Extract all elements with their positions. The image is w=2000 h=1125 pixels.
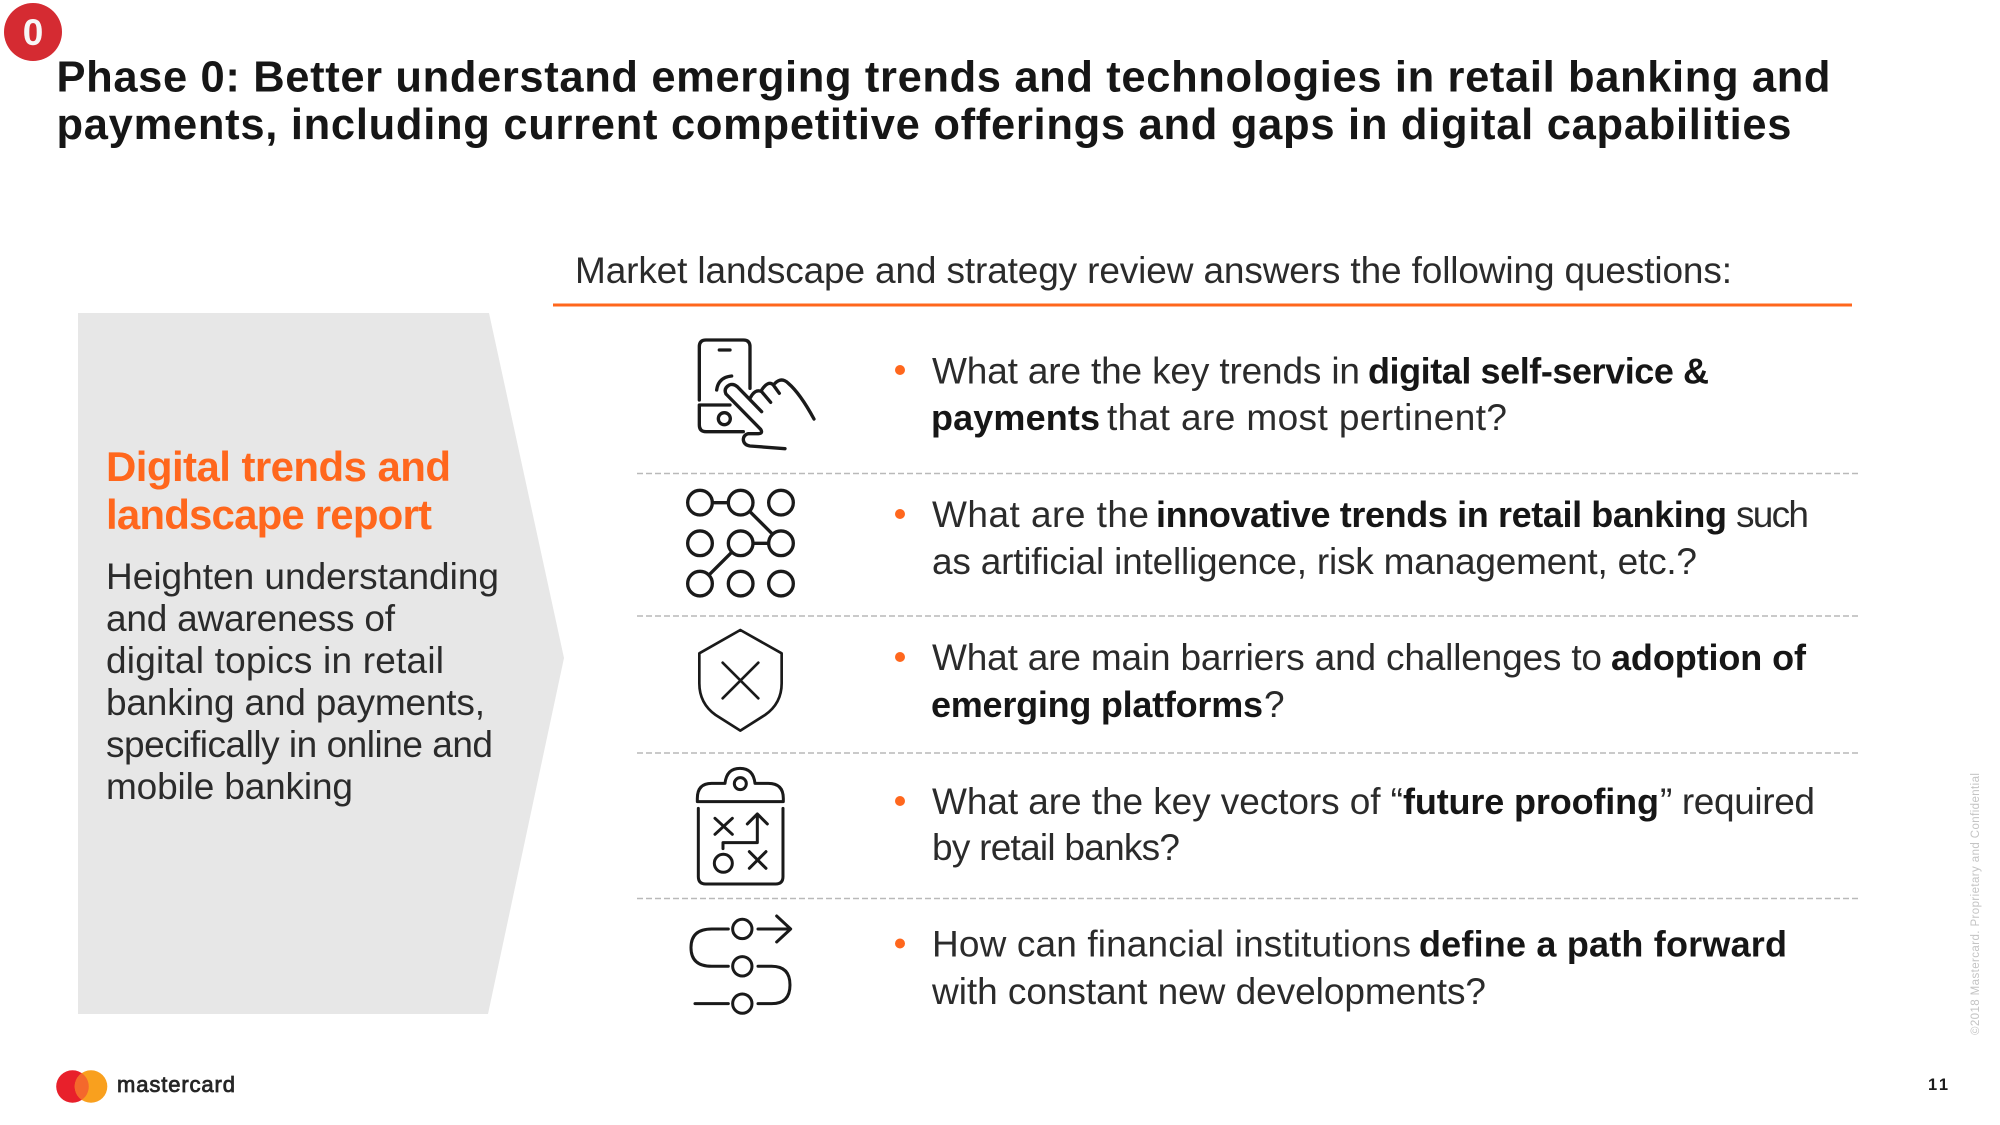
copyright note: ©2018 Mastercard. Proprietary and Confidential [1970, 773, 1982, 1035]
question 4: ” required [1660, 781, 1815, 822]
question 4 [895, 781, 1815, 868]
question 2: What are the [932, 494, 1149, 535]
question 4: future proofing [1403, 781, 1659, 822]
panel heading: Digital trends and [106, 443, 451, 490]
panel body text: specifically in online and [106, 724, 493, 765]
panel body text: digital topics in retail [106, 640, 444, 681]
question 2: as artificial intelligence, risk management, etc.? [932, 541, 1697, 582]
title: payments, including current competitive offerings and gaps in digital capabilities [56, 101, 1792, 149]
question 3: What are main barriers and challenges to [932, 637, 1602, 678]
icon: shield with cross [699, 630, 782, 731]
title: Phase 0: Better understand emerging trends and technologies in retail banking and [56, 54, 1830, 102]
icon: phone with tapping hand [699, 340, 814, 449]
question 1: What are the key trends in [932, 350, 1360, 392]
question 2: such [1736, 494, 1809, 535]
panel: digital trends and landscape report [78, 313, 564, 1014]
question 3: ? [1264, 684, 1285, 725]
panel heading: landscape report [106, 491, 432, 538]
question 3 [895, 637, 1807, 725]
panel body text: and awareness of [106, 598, 396, 639]
question 5: with constant new developments? [931, 971, 1486, 1012]
orange heading rule [553, 304, 1852, 306]
question 4: What are the key vectors of “ [932, 781, 1403, 822]
panel background arrow [78, 313, 564, 1014]
phase badge: 0 [23, 12, 43, 53]
panel heading [106, 443, 451, 538]
section heading: Market landscape and strategy review answers the following questions: [575, 250, 1732, 291]
icon: winding path forward [691, 916, 791, 1013]
panel body text [106, 556, 499, 807]
question 3: adoption of [1611, 637, 1807, 678]
question 1: payments [931, 397, 1100, 438]
phase badge [4, 3, 62, 61]
title [56, 54, 1830, 149]
question 5 [895, 924, 1787, 1012]
question 1 [895, 350, 1709, 438]
page number: 11 [1928, 1076, 1948, 1094]
panel body text: Heighten understanding [106, 556, 499, 597]
question 1: digital self-service & [1368, 350, 1709, 392]
question 1: that are most pertinent? [1107, 397, 1507, 438]
question 3: emerging platforms [931, 684, 1263, 725]
question 5: How can financial institutions [932, 924, 1411, 964]
question 4: by retail banks? [932, 827, 1180, 868]
question 5: define a path forward [1419, 924, 1787, 964]
mastercard logo [56, 1070, 235, 1103]
panel body text: banking and payments, [106, 682, 485, 723]
panel body text: mobile banking [106, 766, 353, 807]
icon: clipboard strategy plan [697, 768, 783, 884]
icon: connected nodes pattern [688, 490, 793, 596]
mastercard logo: mastercard [117, 1072, 235, 1097]
question 2: innovative trends in retail banking [1156, 494, 1727, 535]
question 2 [895, 494, 1809, 582]
